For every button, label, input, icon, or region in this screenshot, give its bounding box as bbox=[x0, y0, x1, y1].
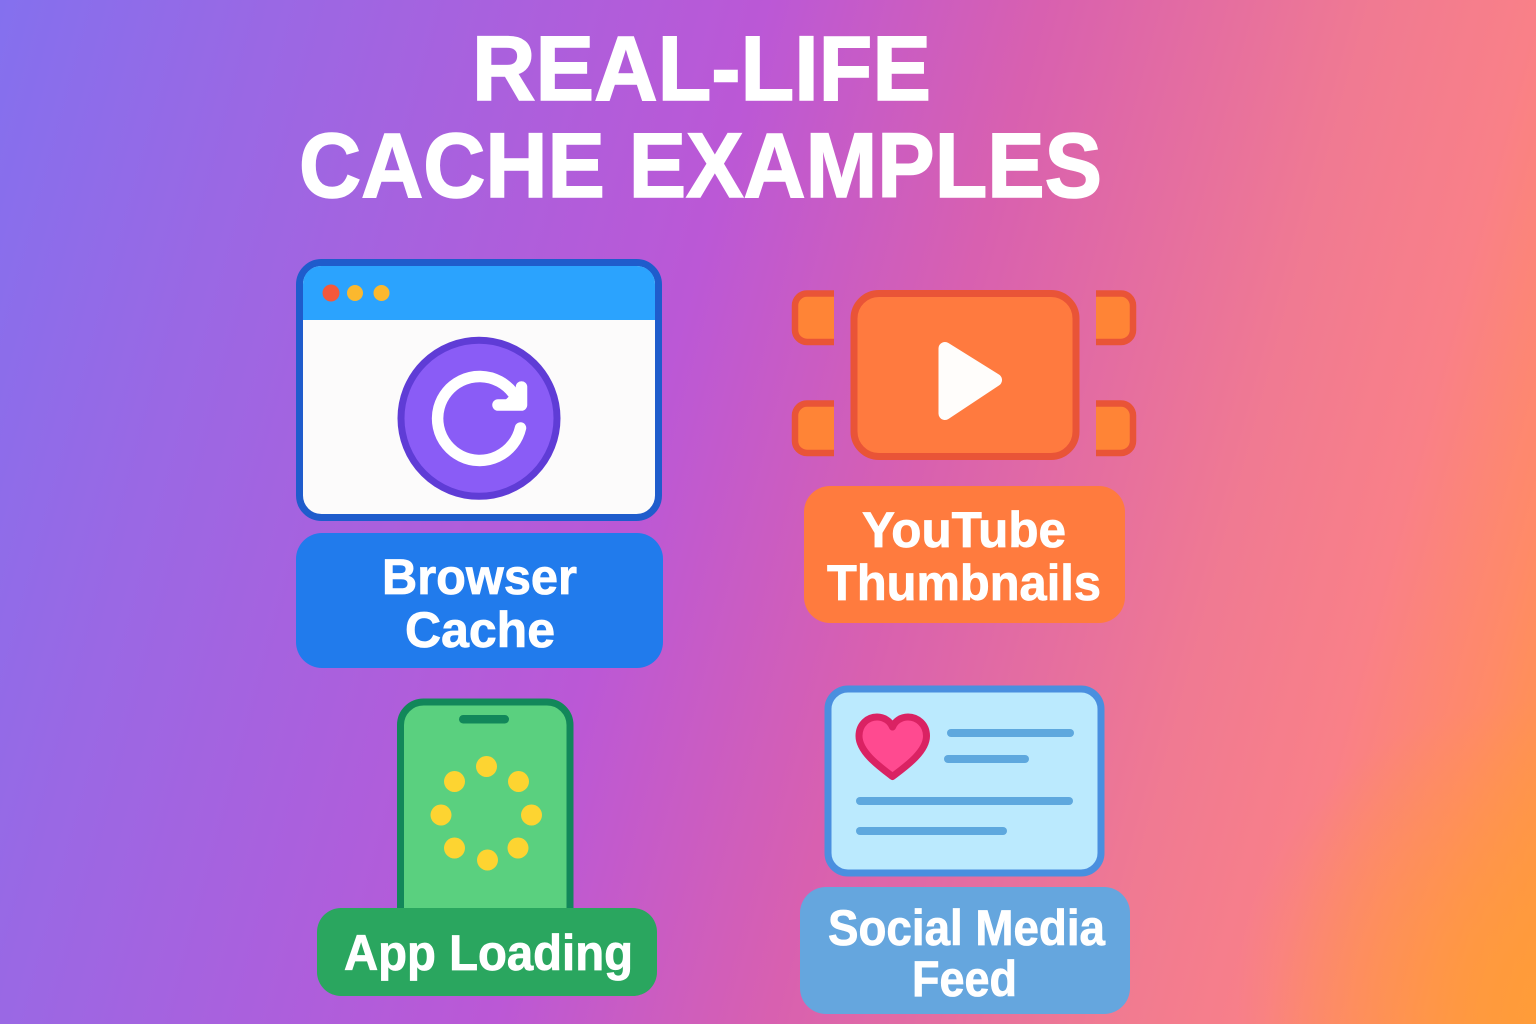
label: social media feed: Social Media bbox=[828, 899, 1106, 956]
label: youtube thumbnails: Thumbnails bbox=[827, 554, 1101, 611]
label: youtube thumbnails bbox=[804, 486, 1125, 623]
icon: phone with spinner bbox=[400, 702, 570, 912]
title: CACHE EXAMPLES bbox=[299, 115, 1102, 217]
label: app loading: App Loading bbox=[344, 924, 633, 981]
panel: app loading bbox=[317, 702, 657, 996]
title bbox=[299, 18, 1102, 217]
label: social media feed bbox=[800, 887, 1130, 1014]
label: browser cache bbox=[296, 533, 663, 668]
panel: browser cache bbox=[296, 262, 663, 668]
label: browser cache: Browser bbox=[382, 548, 577, 605]
title: REAL-LIFE bbox=[472, 18, 931, 120]
label: app loading bbox=[317, 908, 657, 996]
label: youtube thumbnails: YouTube bbox=[862, 501, 1066, 558]
icon: video player with film tabs bbox=[795, 294, 1133, 456]
panel: youtube thumbnails bbox=[795, 294, 1133, 623]
label: social media feed: Feed bbox=[912, 950, 1017, 1007]
icon: browser window bbox=[300, 262, 658, 518]
icon: heart bbox=[859, 717, 926, 776]
label: browser cache: Cache bbox=[405, 601, 555, 658]
icon: social post card bbox=[828, 689, 1101, 873]
panel: social media feed bbox=[800, 689, 1130, 1014]
